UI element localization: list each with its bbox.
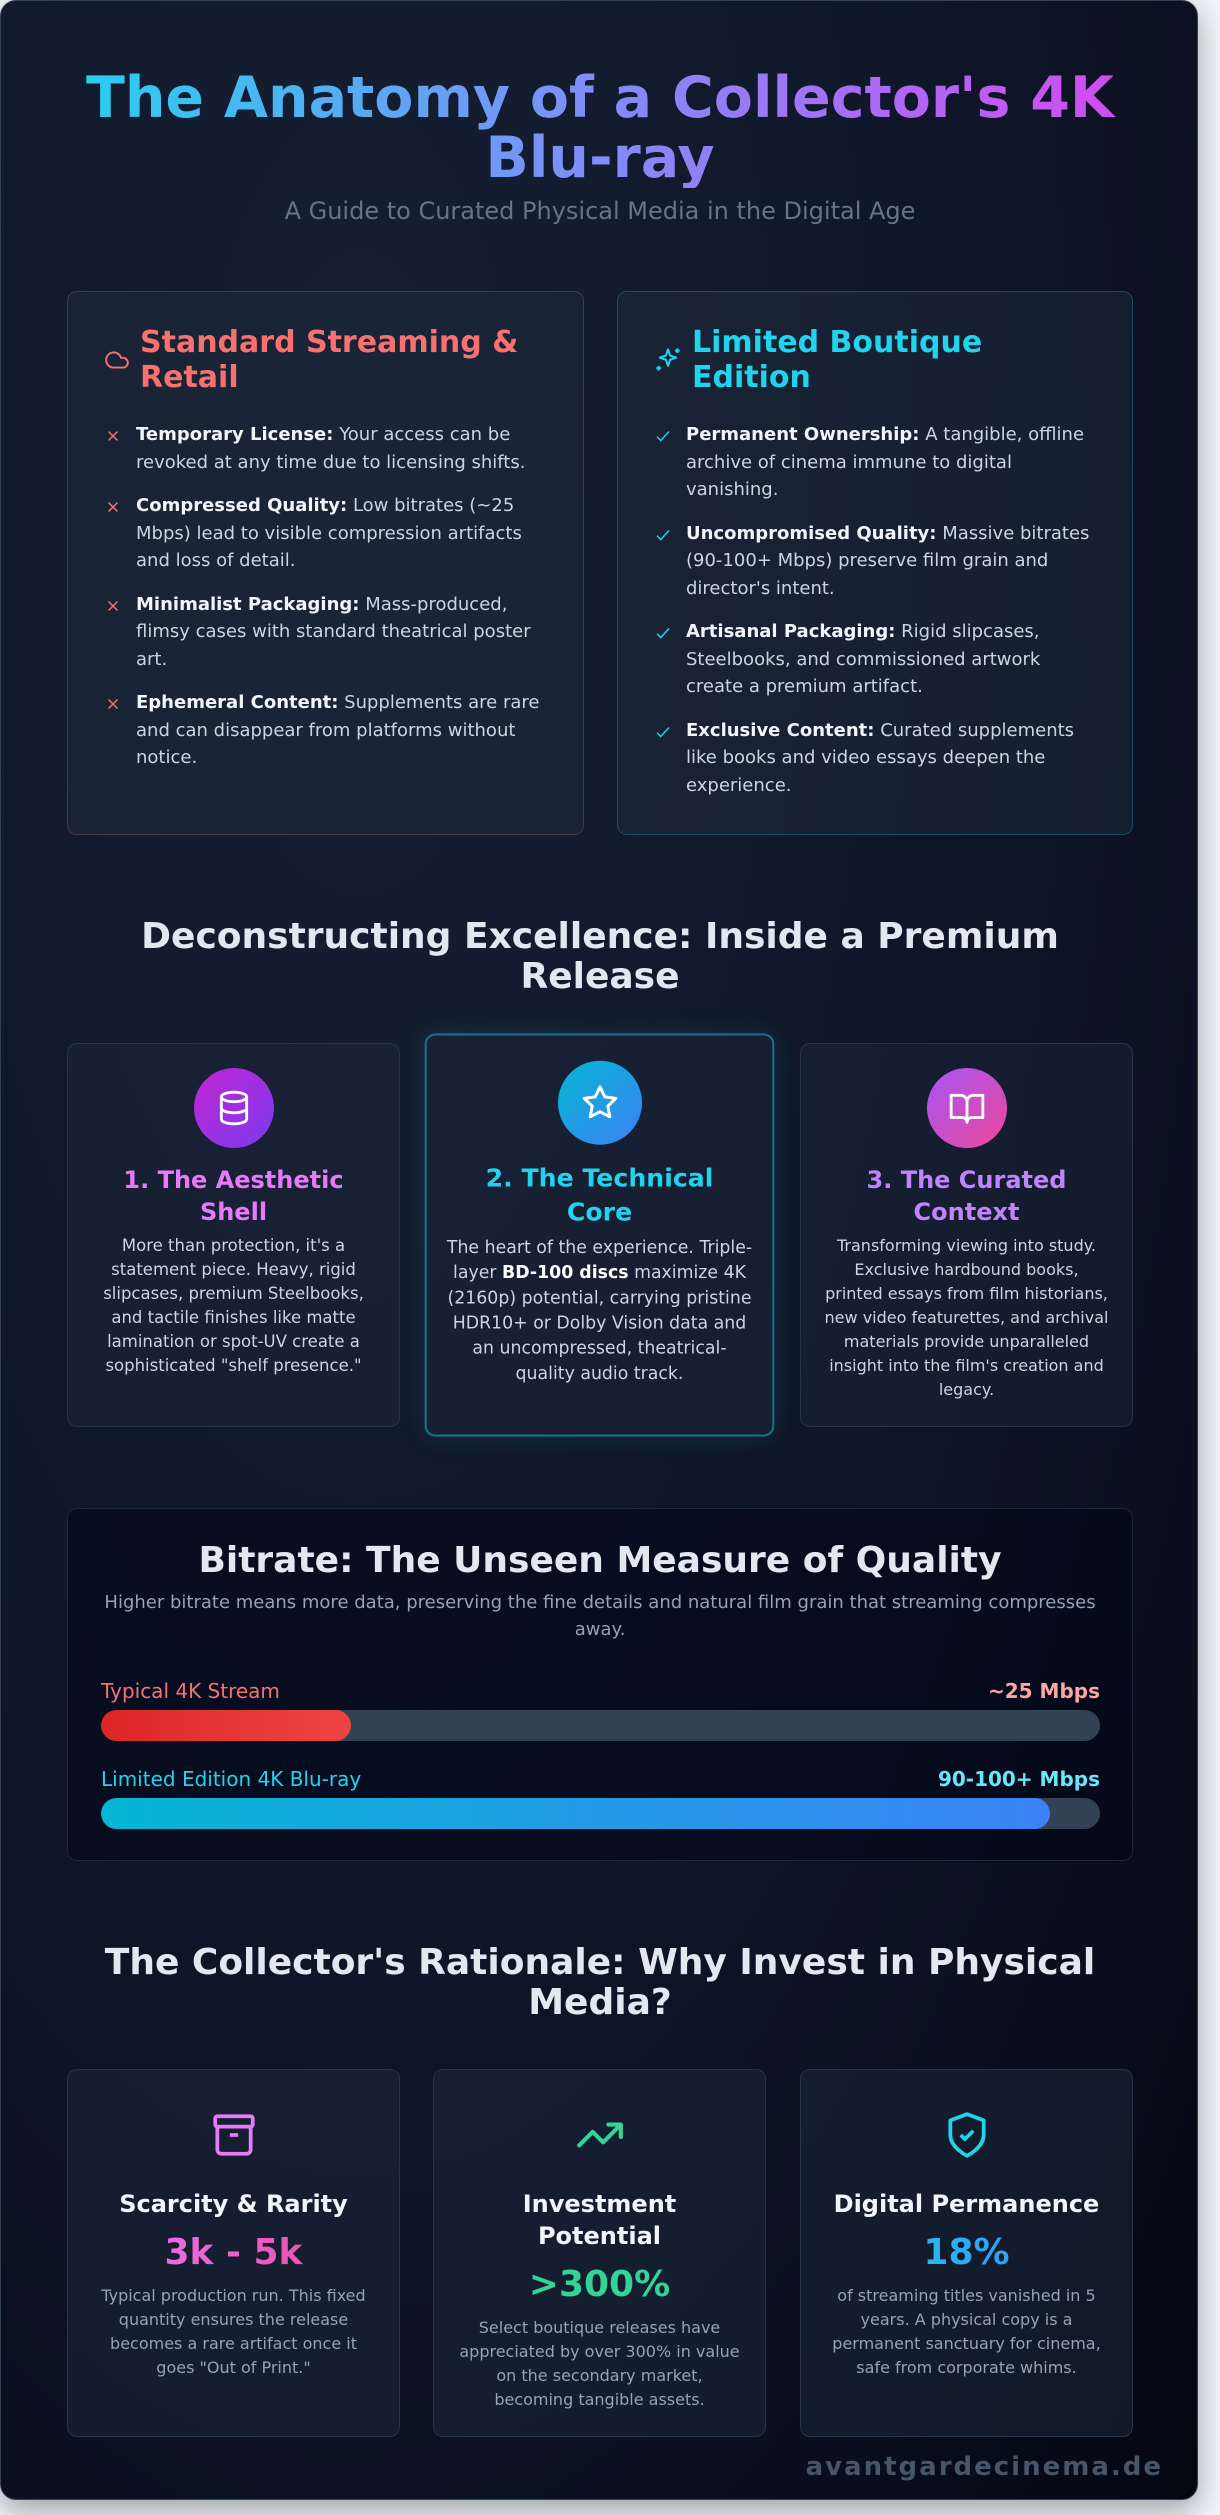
card: permanence: 18% bbox=[923, 2232, 1010, 2273]
card: curated context bbox=[800, 1043, 1133, 1427]
heading: boutique: Edition bbox=[692, 360, 811, 395]
card: aesthetic shell: 1. The Aesthetic Shell bbox=[123, 1166, 344, 1226]
bar: blu-ray: 90-100+ Mbps bbox=[938, 1767, 1100, 1791]
card: investment: Potential bbox=[538, 2222, 661, 2250]
list: drawbacks: Compressed Quality: Low bitrates (~25 Mbps) lead to visible compression artifacts and loss of detail. bbox=[136, 495, 522, 571]
heading: standard streaming: Standard Streaming & bbox=[140, 325, 518, 360]
icon: book bbox=[926, 1068, 1006, 1148]
card: scarcity: Typical production run. This fixed quantity ensures the release becomes a rare artifact once it goes "Out of Print." bbox=[101, 2286, 366, 2377]
card: curated context: legacy. bbox=[939, 1380, 994, 1399]
card: curated context: 3. The Curated Context bbox=[867, 1166, 1066, 1226]
list: benefits: Permanent Ownership: A tangible, offline archive of cinema immune to digital vanishing. bbox=[686, 424, 1084, 500]
list: drawbacks: Ephemeral Content: Supplements are rare and can disappear from platforms without notice. bbox=[136, 692, 539, 768]
card: investment bbox=[433, 2069, 766, 2437]
card: scarcity: Scarcity & Rarity bbox=[119, 2190, 348, 2218]
icon: archive bbox=[213, 2114, 255, 2156]
heading: standard streaming: Retail bbox=[140, 360, 239, 395]
card: scarcity bbox=[67, 2069, 400, 2437]
list: drawbacks bbox=[108, 424, 539, 768]
list: benefits: Exclusive Content: Curated supplements like books and video essays deepen the experience. bbox=[686, 720, 1074, 796]
icon: star bbox=[558, 1061, 642, 1145]
list: drawbacks: Minimalist Packaging: Mass-produced, flimsy cases with standard theatrical poster art. bbox=[136, 594, 531, 670]
bar: streaming bbox=[100, 1679, 1100, 1741]
icon: shield check bbox=[948, 2112, 986, 2158]
panel: standard streaming bbox=[67, 291, 584, 835]
card: technical core: The heart of the experience. Triple- bbox=[447, 1237, 752, 1257]
card: permanence bbox=[800, 2069, 1133, 2437]
bar: blu-ray: Limited Edition 4K Blu-ray bbox=[101, 1767, 361, 1791]
card: technical core: an uncompressed, theatrical- bbox=[472, 1338, 727, 1358]
card: investment: >300% bbox=[529, 2264, 670, 2305]
heading: boutique bbox=[656, 325, 982, 395]
card: aesthetic shell bbox=[67, 1043, 400, 1427]
card: aesthetic shell: More than protection, it's a statement piece. Heavy, rigid slipcases, premium Steelbooks, and tactile finishes like matte lamination or spot-UV create a sophisticated "shelf presence." bbox=[103, 1236, 364, 1375]
subtitle: A Guide to Curated Physical Media in the Digital Age bbox=[285, 197, 915, 225]
heading: standard streaming bbox=[105, 325, 518, 395]
bar: blu-ray bbox=[101, 1767, 1100, 1829]
list: benefits: Uncompromised Quality: Massive bitrates (90-100+ Mbps) preserve film grain and director's intent. bbox=[686, 522, 1089, 598]
heading: deconstructing: Deconstructing Excellence: Inside a Premium Release bbox=[141, 916, 1059, 997]
text: bitrate subtitle: Higher bitrate means more data, preserving the fine details and natural film grain that streaming compresses away. bbox=[104, 1592, 1096, 1640]
icon: trending up bbox=[577, 2122, 623, 2148]
card: investment: Select boutique releases have appreciated by over 300% in value on the secondary market, becoming tangible assets. bbox=[459, 2318, 740, 2409]
card: curated context: printed essays from film historians, bbox=[825, 1284, 1108, 1303]
bar: streaming: ~25 Mbps bbox=[988, 1679, 1100, 1703]
heading: bitrate: Bitrate: The Unseen Measure of Quality bbox=[198, 1540, 1002, 1581]
title: The Anatomy of a Collector's 4K Blu-ray bbox=[86, 65, 1114, 191]
card: curated context: new video featurettes, and archival bbox=[825, 1308, 1108, 1327]
card: curated context: insight into the film's creation and bbox=[829, 1356, 1104, 1375]
card: investment: Investment bbox=[523, 2190, 676, 2218]
panel: boutique edition bbox=[617, 291, 1133, 835]
card: permanence: of streaming titles vanished in 5 years. A physical copy is a permanent sanctuary for cinema, safe from corporate whims. bbox=[832, 2286, 1101, 2377]
list: drawbacks: Temporary License: Your access can be revoked at any time due to licensing shifts. bbox=[136, 424, 525, 472]
card: curated context: Transforming viewing into study. bbox=[837, 1236, 1096, 1255]
card: technical core: (2160p) potential, carrying pristine bbox=[447, 1288, 752, 1307]
card: curated context: materials provide unparalleled bbox=[844, 1332, 1089, 1351]
card: curated context: Exclusive hardbound books, bbox=[854, 1260, 1079, 1279]
heading: boutique: Limited Boutique bbox=[692, 325, 982, 360]
card: technical core: quality audio track. bbox=[516, 1363, 683, 1383]
card: technical core bbox=[425, 1033, 774, 1437]
list: benefits: Artisanal Packaging: Rigid slipcases, Steelbooks, and commissioned artwork create a premium artifact. bbox=[686, 621, 1040, 697]
card: technical core: layer BD-100 discs maximize 4K bbox=[453, 1262, 746, 1282]
panel: bitrate bbox=[67, 1508, 1133, 1861]
list: benefits bbox=[656, 424, 1089, 796]
heading: rationale: The Collector's Rationale: Why Invest in Physical Media? bbox=[105, 1942, 1095, 2023]
card: technical core: 2. The Technical Core bbox=[486, 1164, 713, 1227]
icon: database bbox=[194, 1068, 274, 1148]
card: scarcity: 3k - 5k bbox=[164, 2232, 302, 2273]
card: technical core: HDR10+ or Dolby Vision data and bbox=[453, 1313, 746, 1333]
footer: brand: avantgardecinema.de bbox=[806, 2452, 1163, 2482]
card: permanence: Digital Permanence bbox=[834, 2190, 1099, 2218]
bar: streaming: Typical 4K Stream bbox=[101, 1679, 280, 1703]
